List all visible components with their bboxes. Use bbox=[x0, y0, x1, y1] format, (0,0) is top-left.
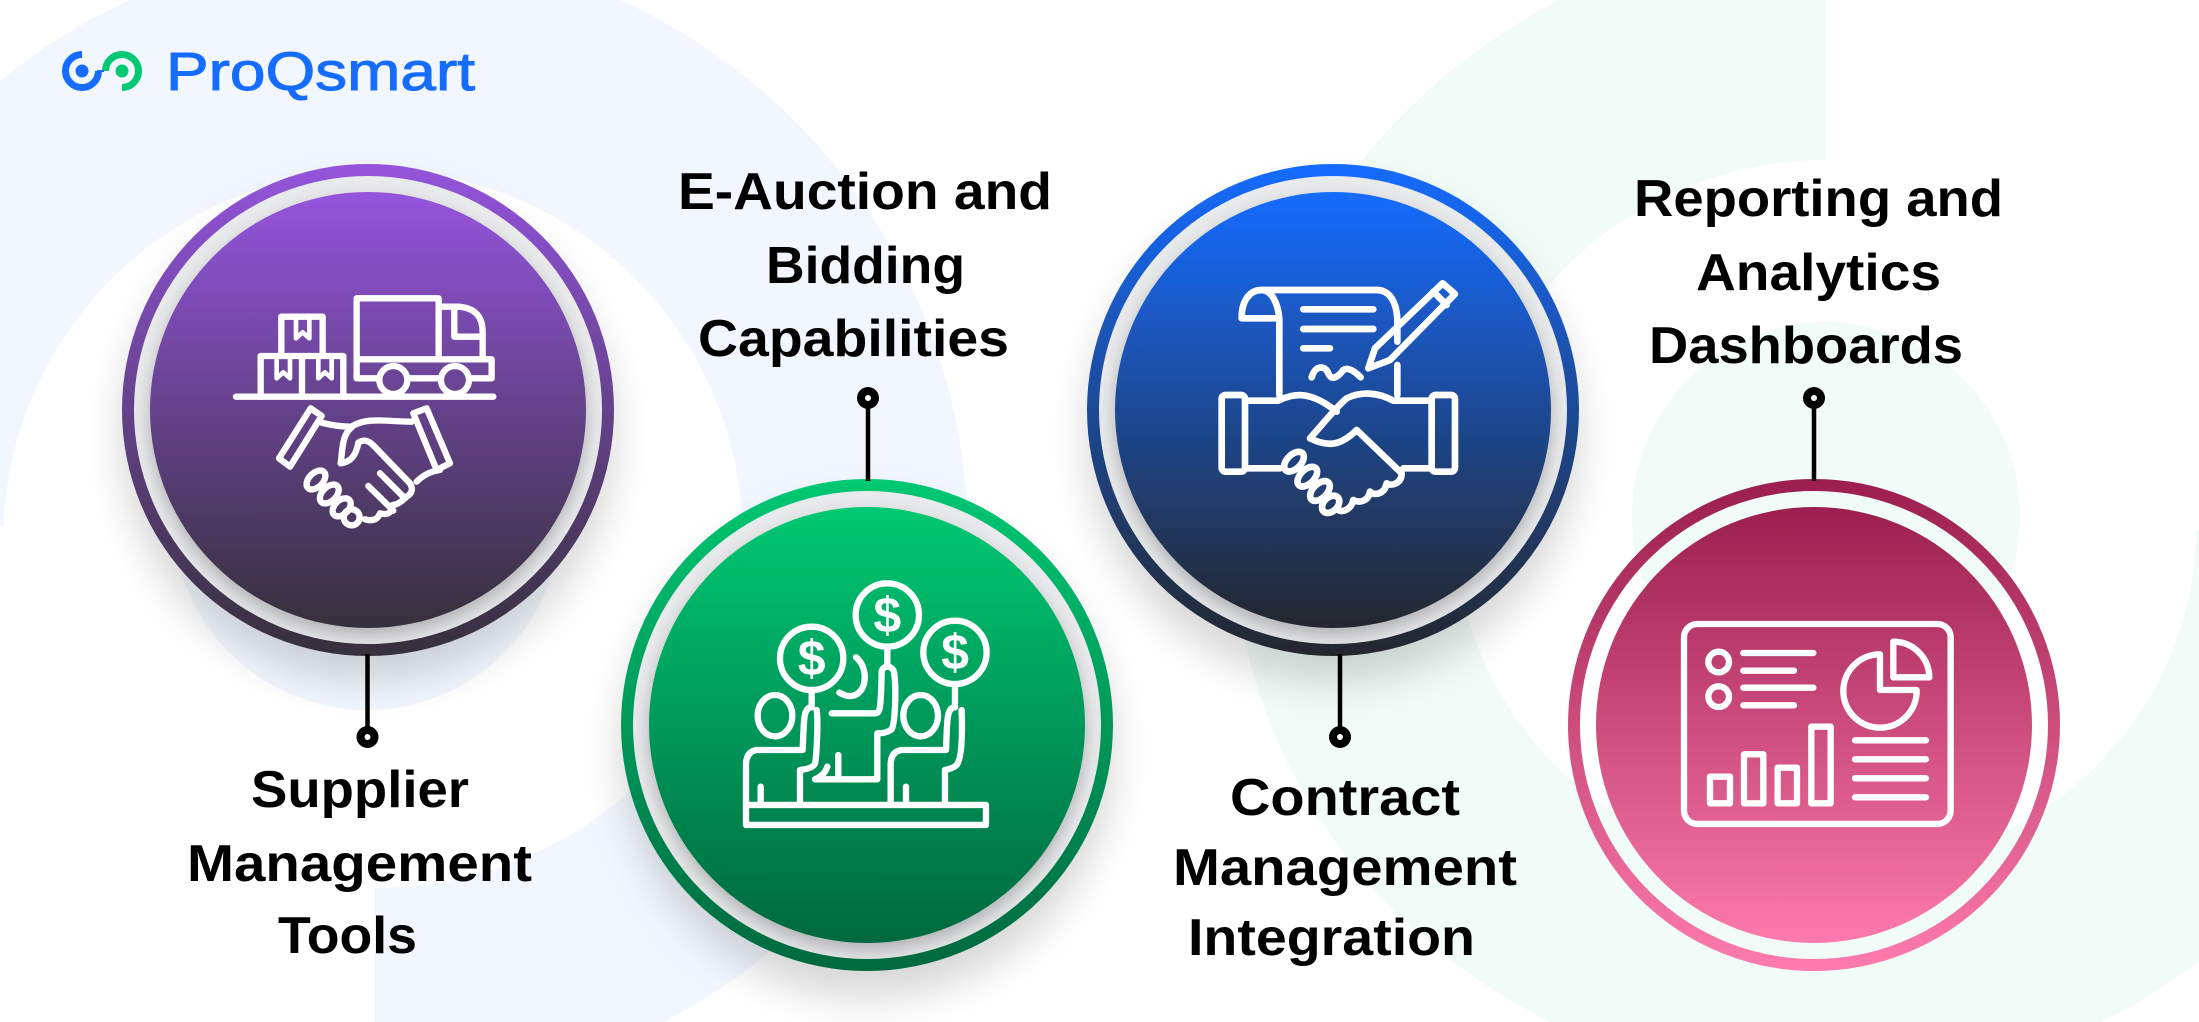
logo: ProQsmart bbox=[66, 42, 475, 102]
label: Contract Management Integration: Management bbox=[1173, 839, 1517, 897]
logo mark bbox=[66, 54, 139, 88]
circle: reporting and analytics bbox=[1574, 485, 2054, 965]
label: E-Auction and Bidding Capabilities: Capabilities bbox=[698, 310, 1009, 368]
label: E-Auction and Bidding Capabilities: E-Auction and bbox=[678, 163, 1052, 221]
label: Contract Management Integration bbox=[1173, 769, 1517, 967]
label: E-Auction and Bidding Capabilities: Bidding bbox=[766, 237, 965, 295]
icon: bidders with dollar paddles: $ bbox=[798, 631, 826, 687]
label: Supplier Management Tools bbox=[187, 761, 532, 965]
connector: contract bbox=[1329, 654, 1351, 748]
circle: e-auction and bidding bbox=[621, 479, 1113, 971]
label: E-Auction and Bidding Capabilities bbox=[678, 163, 1052, 368]
icon: truck, boxes and handshake bbox=[236, 298, 493, 525]
background: green ring shape bbox=[1233, 0, 2199, 1022]
circle: supplier management bbox=[122, 164, 614, 656]
label: Supplier Management Tools: Tools bbox=[278, 907, 417, 965]
label: Reporting and Analytics Dashboards: Reporting and bbox=[1634, 170, 2003, 228]
icon: bidders with dollar paddles: $ bbox=[941, 625, 969, 681]
background: blue ring shape bbox=[0, 0, 968, 1022]
icon: contract, pen and handshake bbox=[1222, 283, 1455, 516]
icon: analytics dashboard bbox=[1684, 624, 1951, 824]
circle: contract management bbox=[1087, 164, 1579, 656]
label: Contract Management Integration: Contract bbox=[1230, 769, 1460, 827]
label: Reporting and Analytics Dashboards bbox=[1634, 170, 2003, 375]
label: Supplier Management Tools: Management bbox=[187, 835, 532, 893]
logo wordmark: ProQsmart bbox=[166, 42, 475, 102]
label: Reporting and Analytics Dashboards: Analytics bbox=[1696, 244, 1941, 302]
label: Reporting and Analytics Dashboards: Dashboards bbox=[1649, 317, 1963, 375]
icon: bidders with dollar paddles bbox=[746, 583, 987, 825]
connector: reporting bbox=[1803, 387, 1825, 481]
icon: bidders with dollar paddles: $ bbox=[873, 587, 901, 643]
label: Supplier Management Tools: Supplier bbox=[251, 761, 469, 819]
connector: e-auction bbox=[857, 387, 879, 481]
label: Contract Management Integration: Integration bbox=[1188, 909, 1475, 967]
connector: supplier bbox=[356, 654, 378, 748]
